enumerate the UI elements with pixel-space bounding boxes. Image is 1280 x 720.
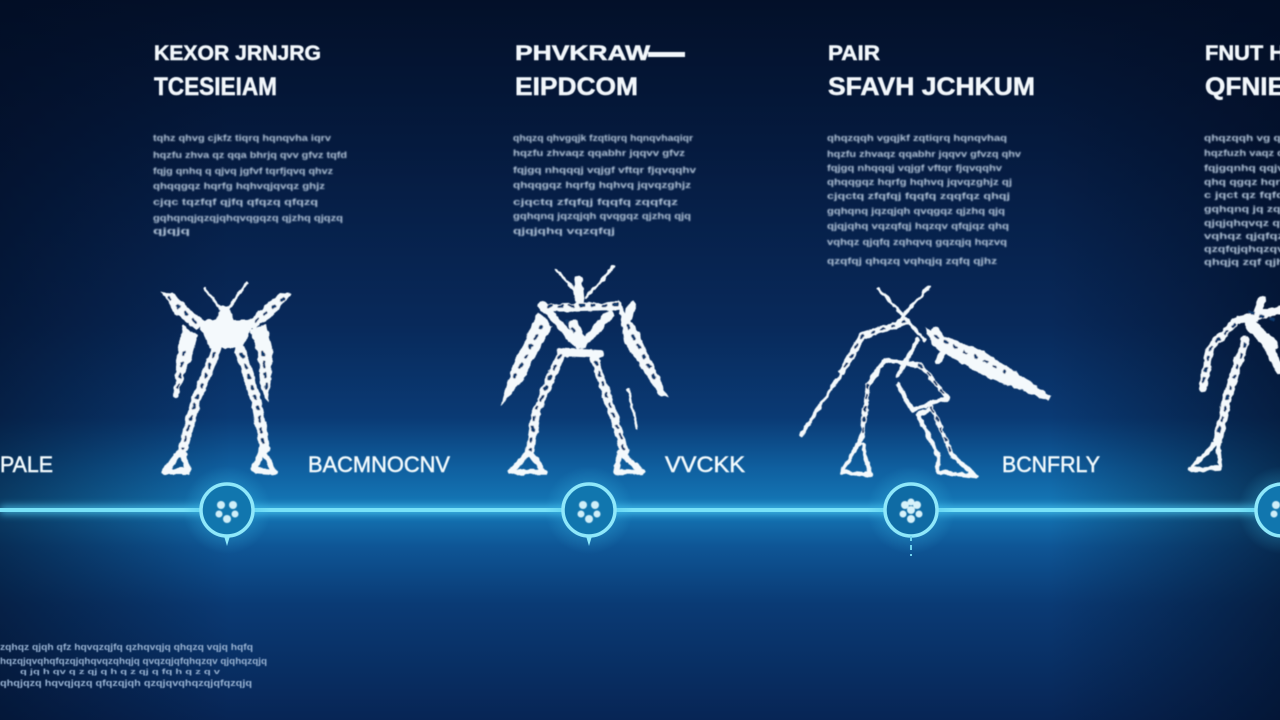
text block: column 1: cjqc tqzfqf qjfq qfqzq qfqzq (153, 197, 318, 207)
text block: column 4: qhqjq zqf qjh (1204, 257, 1280, 267)
text block: column 2: hqzfu zhvaqz qqabhr jqqvv gfvz (513, 148, 686, 158)
text block: column 4: gqhqnq jq zqj (1204, 204, 1280, 214)
heading: column 1 (154, 42, 321, 101)
heading: column 4: FNUT H (1205, 42, 1280, 65)
text block: column 3: fqjgq nhqqqj vqjgf vftqr fjqvqqhv (827, 163, 1002, 173)
step labels: BCNFRLY (1002, 452, 1100, 477)
panel: column 1 text (153, 42, 347, 236)
text block: column 4: qzqfqjqhqzqv (1204, 244, 1280, 254)
robot 4 (1190, 300, 1280, 470)
text block: column 4: hqzfuzh vaqz q (1204, 148, 1280, 158)
text block: column 3: cjqctq zfqfqj fqqfq zqqfqz qhqj (827, 191, 1010, 201)
text block: column 2: cjqctq zfqfqj fqqfq zqqfqz (513, 197, 679, 207)
timeline node 2 (545, 466, 633, 554)
text block: column 4 (1204, 133, 1280, 267)
footer text block: q jq h qv q z qj q h q z qj q fq h q z q v (20, 669, 220, 676)
footer text block: qhqjqzq hqvqjqzq qfqzqjqh qzqjqvqhqzqjqfqzqjq (0, 678, 252, 688)
text block: column 4: qjqjqhqvqz qf (1204, 218, 1280, 228)
text block: column 3: vqhqz qjqfq zqhqvq gqzqjq hqzvq (827, 237, 1007, 247)
text block: column 3 (827, 133, 1021, 266)
text block: column 3: hqzfu zhvaqz qqabhr jqqvv gfvzq qhv (827, 149, 1021, 159)
heading: column 3: SFAVH JCHKUM (828, 73, 1035, 101)
heading: column 4: QFNIE (1205, 73, 1280, 101)
robot 1 (160, 283, 292, 472)
text block: column 3: qhqzqqh vgqjkf zqtiqrq hqnqvhaq (827, 133, 1007, 143)
text block: column 2: qhqqgqz hqrfg hqhvq jqvqzghjz (513, 180, 692, 190)
text block: column 1: fqjg qnhq q qjvq jgfvf tqrfjqvq qhvz (153, 166, 334, 176)
text block: column 4: qhq qgqz hqrf (1204, 177, 1280, 187)
footer text block: hqzqjqvqhqfqzqjqhqvqzqhqjq qvqzqjqfqhqzqv qjqhqzqjq (0, 656, 267, 666)
text block: column 2: fqjgq nhqqqj vqjgf vftqr fjqvqqhv (513, 165, 696, 175)
text block: column 3: gqhqnq jqzqjqh qvqgqz qjzhq qjq (827, 206, 1005, 216)
text block: column 2 (513, 133, 696, 236)
step labels: BACMNOCNV (308, 452, 450, 477)
heading: column 2: EIPDCOM (515, 73, 638, 101)
heading: column 2 (515, 42, 685, 101)
panel: column 3 text (827, 42, 1035, 266)
robot 2 (501, 267, 668, 472)
text block: column 1: qjqjq (153, 226, 190, 236)
step labels: VVCKK (665, 452, 745, 477)
heading: column 1: TCESIEIAM (154, 73, 277, 101)
text block: column 4: c jqct qz fqfq (1204, 190, 1280, 200)
text block: column 3: qjqjqhq vqzqfqj hqzqv qfqjqz qhq (827, 221, 1009, 231)
panel: column 2 text (513, 42, 696, 236)
timeline node 3 (867, 466, 955, 556)
robot 3 (801, 287, 1052, 476)
text block: column 4: fqjgqnhq qqjv (1204, 163, 1280, 173)
heading: column 3: PAIR (828, 42, 880, 65)
timeline line (0, 506, 1280, 514)
text block: column 1: gqhqnqjqzqjqhqvqgqzq qjzhq qjqzq (153, 213, 343, 223)
step labels (0, 452, 1100, 477)
text block: column 1: tqhz qhvg cjkfz tiqrq hqnqvha iqrv (153, 133, 331, 143)
text block: column 1: hqzfu zhva qz qqa bhrjq qvv gfvz tqfd (153, 150, 347, 160)
text block: column 4: vqhqz qjqfqz (1204, 231, 1280, 241)
heading: column 4 (1205, 42, 1280, 101)
heading: column 1: KEXOR JRNJRG (154, 42, 321, 65)
timeline node 4 (1238, 466, 1280, 554)
text block: column 3: qzqfqj qhqzq vqhqjq zqfq qjhz (827, 256, 998, 266)
footer text block (0, 642, 267, 688)
text block: column 3: qhqqgqz hqrfg hqhvq jqvqzghjz qj (827, 177, 1012, 187)
text block: column 4: qhqzqqh vg qj (1204, 133, 1280, 143)
text block: column 2: qjqjqhq vqzqfqj (513, 226, 615, 236)
panel: column 4 text (1204, 42, 1280, 267)
text block: column 2: gqhqnq jqzqjqh qvqgqz qjzhq qjq (513, 211, 691, 221)
text block: column 1 (153, 133, 347, 236)
heading: column 3 (828, 42, 1035, 101)
footer text block: zqhqz qjqh qfz hqvqzqjfq qzhqvqjq qhqzq vqjq hqfq (0, 642, 253, 652)
step labels: PALE (0, 452, 53, 477)
text block: column 2: qhqzq qhvgqjk fzqtiqrq hqnqvhaqiqr (513, 133, 694, 143)
text block: column 1: qhqqgqz hqrfg hqhvqjqvqz ghjz (153, 181, 326, 191)
timeline node 1 (183, 466, 271, 554)
heading: column 2: PHVKRAW (515, 42, 650, 65)
